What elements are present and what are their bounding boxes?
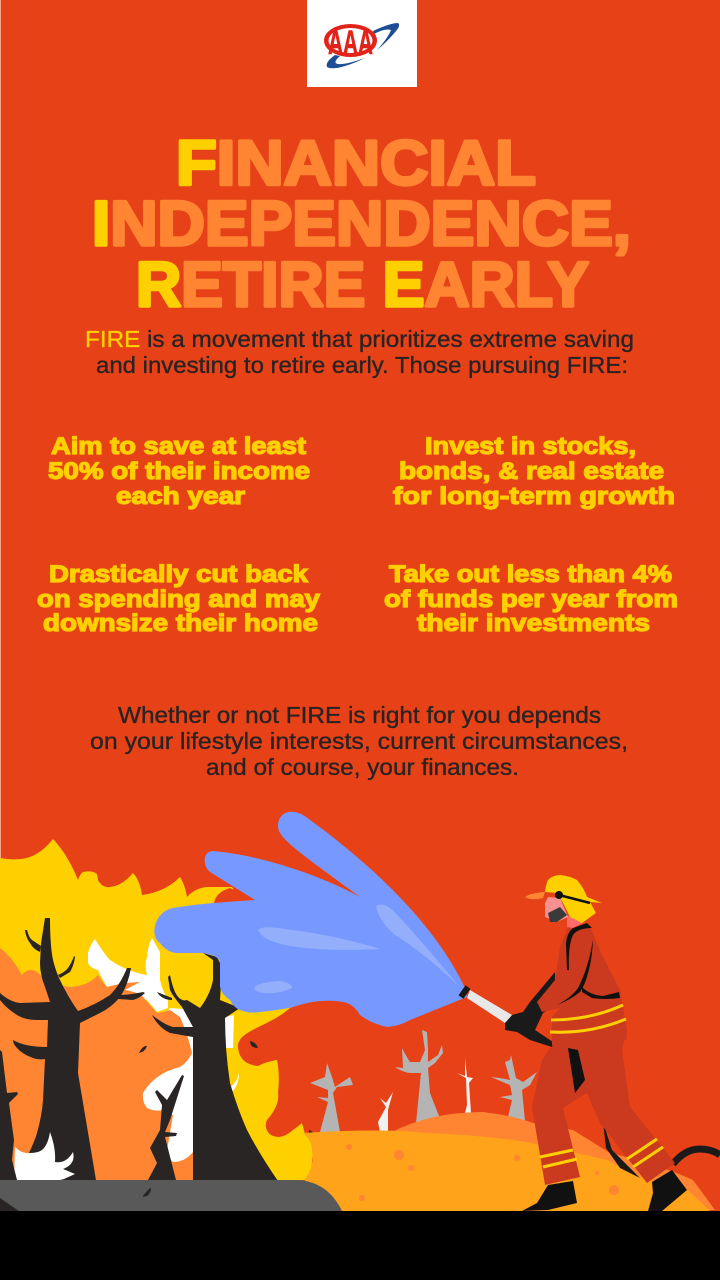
closing text: and of course, your finances.: [206, 754, 519, 780]
tree twigs: [25, 930, 145, 1000]
title: INDEPENDENCE,: [92, 189, 631, 259]
nozzle: [467, 990, 512, 1023]
water spray: [154, 812, 467, 1027]
point: save income: 50% of their income: [48, 458, 310, 485]
title: RETIRE EARLY: [136, 250, 589, 320]
flames: white: [88, 938, 168, 1012]
leg gap shadow: [568, 1048, 585, 1093]
face: [545, 897, 568, 922]
glove and back arm: [505, 972, 555, 1047]
closing text: [90, 702, 628, 780]
burnt tree: center: [152, 953, 278, 1181]
flames: yellow: [0, 839, 313, 1180]
illustration: fire scene: [0, 812, 720, 1211]
far leg shadow: [603, 1122, 640, 1178]
point: cut spending: [37, 561, 321, 637]
burnt stump: center: [148, 1075, 184, 1180]
point: invest: [393, 433, 675, 510]
point: withdraw funds: [384, 561, 678, 637]
point: withdraw funds: their investments: [417, 610, 650, 637]
logo: AAA: [307, 0, 417, 87]
hose: [673, 1149, 720, 1164]
bottom black band: [0, 1211, 720, 1280]
closing text: on your lifestyle interests, current circumstances,: [90, 728, 628, 754]
intro text: and investing to retire early. Those pursuing FIRE:: [96, 352, 628, 378]
burnt stump: far left: [0, 1050, 18, 1180]
point: save income: Aim to save at least: [51, 433, 306, 460]
logo: AAA: AAA: [328, 24, 373, 62]
point: invest: bonds, & real estate: [399, 458, 664, 485]
point: cut spending: Drastically cut back: [49, 561, 309, 588]
point: cut spending: downsize their home: [43, 610, 318, 637]
point: cut spending: on spending and may: [37, 586, 321, 613]
point: withdraw funds: Take out less than 4%: [389, 561, 672, 588]
flames: red overlay: [238, 1003, 372, 1137]
point: invest: Invest in stocks,: [425, 433, 636, 460]
neck: [567, 915, 583, 928]
mask: [548, 907, 567, 922]
grey trees background: [310, 1030, 537, 1141]
harness: [557, 923, 620, 1005]
embers: [139, 1041, 314, 1138]
point: save income: [48, 433, 310, 510]
title: [92, 128, 631, 320]
white saplings: [378, 1058, 473, 1132]
hill dots: [346, 1144, 619, 1201]
legs: [532, 1030, 675, 1185]
flames: orange: [0, 948, 195, 1180]
water highlights: [254, 904, 458, 993]
helmet strap: [559, 895, 590, 903]
helmet brim: [525, 892, 545, 899]
point: invest: for long-term growth: [393, 483, 675, 510]
torso: [537, 927, 627, 1045]
helmet: [545, 875, 602, 923]
point: withdraw funds: of funds per year from: [384, 586, 678, 613]
title: FINANCIAL: [176, 128, 536, 198]
closing text: Whether or not FIRE is right for you depends: [118, 702, 601, 728]
firefighter: [461, 875, 687, 1211]
boots: [522, 1170, 687, 1211]
intro text: FIRE is a movement that prioritizes extreme saving: [85, 326, 634, 352]
intro text: [85, 326, 634, 378]
suit stripes: [540, 1005, 663, 1167]
burnt tree: left: [0, 918, 131, 1180]
flames: white at tree base: [14, 1132, 75, 1180]
hills: [390, 1112, 715, 1211]
point: save income: each year: [116, 483, 245, 510]
grey road: [0, 1180, 342, 1211]
